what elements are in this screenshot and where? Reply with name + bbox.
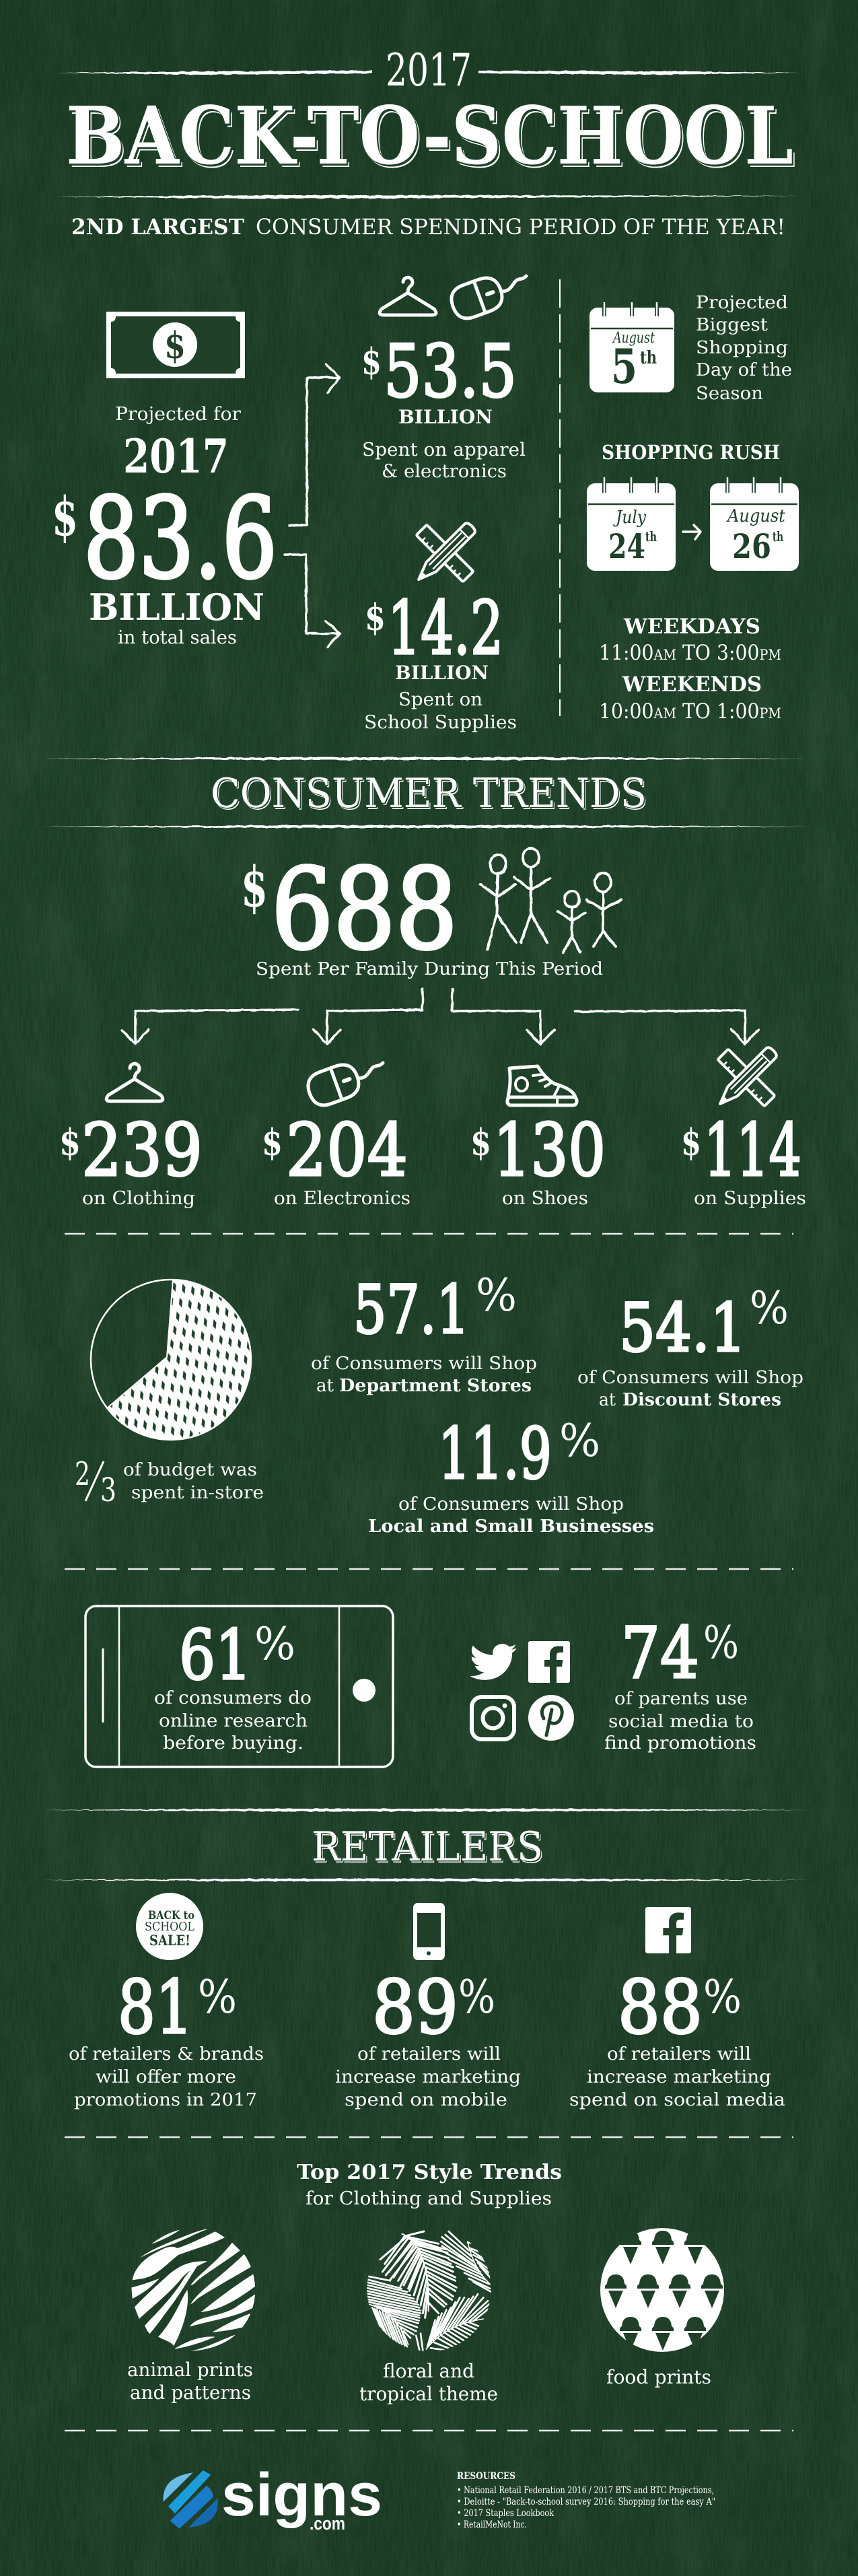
icon: sale badge: SCHOOL [145, 1920, 194, 1934]
description: spend on social media [569, 2090, 785, 2110]
amount: 204 [286, 1109, 408, 1193]
icon: pencil and ruler [414, 522, 476, 584]
percent sign: % [703, 1617, 739, 1669]
stat: department stores: 57.1 [353, 1272, 470, 1349]
icon: sale badge: BACK to [148, 1909, 194, 1922]
stat: clothing [59, 1064, 203, 1209]
pattern: zebra [131, 2229, 255, 2351]
icon: computer mouse [304, 1061, 383, 1109]
description [69, 2044, 264, 2110]
heading: top style trends: Top 2017 Style Trends [297, 2161, 562, 2184]
text: two thirds of budget: spent in-store [131, 1483, 264, 1503]
icon: mobile phone [413, 1903, 445, 1960]
caption: animal prints [127, 2359, 253, 2404]
description: Spent on apparel [362, 440, 526, 460]
description: promotions in 2017 [74, 2090, 257, 2110]
rule under title [55, 195, 801, 199]
panel: social media [470, 1612, 756, 1753]
description [362, 440, 526, 482]
icon: calendar august 26th: August [726, 506, 786, 526]
label: on Clothing [82, 1188, 195, 1209]
icon: dollar bill: $ [164, 324, 186, 367]
percentage: 89 [372, 1964, 458, 2050]
title block [55, 44, 801, 240]
resources list: • RetailMeNot Inc. [457, 2519, 527, 2530]
dollar sign: $ [52, 485, 78, 548]
label: on Supplies [694, 1188, 806, 1209]
description [335, 2044, 521, 2110]
description [364, 689, 517, 733]
stat: discount stores: % [750, 1282, 789, 1334]
panel: school supplies [364, 522, 517, 733]
description: will offer more [96, 2067, 236, 2087]
panel: biggest shopping day [589, 293, 792, 404]
icon: calendar august 26th [710, 477, 799, 571]
section: consumer trends [41, 757, 810, 1209]
text: weekend hours: 10:00AM TO 1:00PM [599, 699, 781, 724]
caption: floral [359, 2360, 498, 2405]
stat: local and small businesses: of Consumers will Shop [398, 1494, 624, 1515]
description: increase marketing [335, 2067, 521, 2087]
description: of consumers do [154, 1688, 312, 1708]
icon: calendar july 24th: July [613, 508, 646, 528]
description [569, 2044, 785, 2110]
dollar sign: $ [365, 596, 386, 639]
total amount: 83.6 [83, 474, 277, 603]
resources list: • Deloitte - "Back-to-school survey 2016: Shopping for the easy A" [457, 2497, 715, 2507]
billion: BILLION [398, 406, 493, 428]
stat: discount stores: at [599, 1390, 616, 1410]
description [604, 1689, 756, 1753]
section: retailers [41, 1809, 810, 2110]
description: of retailers & brands [69, 2044, 264, 2064]
panel: where consumers shop [75, 1269, 803, 1537]
icon: dollar bill [106, 312, 245, 378]
stat: discount stores: of Consumers will Shop [577, 1368, 803, 1388]
label: on Shoes [502, 1188, 588, 1209]
caption: floral: tropical theme [359, 2383, 498, 2405]
amount: 239 [81, 1109, 203, 1193]
year 2017: 2017 [123, 429, 229, 484]
stat: mobile [335, 1903, 521, 2110]
description: of parents use [614, 1689, 748, 1709]
stat: promotions [69, 1893, 264, 2110]
heading: consumer trends: CONSUMER TRENDS [211, 770, 647, 817]
stat: discount stores: Discount Stores [622, 1390, 781, 1410]
stat: social [569, 1907, 785, 2110]
heading rule right [478, 71, 799, 75]
dollar sign: $ [681, 1121, 701, 1164]
icon: facebook [528, 1641, 570, 1683]
divider: dashed [65, 2430, 793, 2431]
description: School Supplies [364, 712, 517, 733]
dollar sign: $ [241, 855, 268, 919]
stat: supplies [681, 1046, 806, 1209]
caption: floral: floral and [383, 2360, 474, 2382]
text: projected biggest shopping day: Day of the [696, 360, 792, 380]
icon: sale badge [136, 1893, 203, 1960]
description: Spent on [398, 689, 482, 710]
icon: sneaker [507, 1066, 577, 1105]
icon: pencil and ruler [715, 1046, 778, 1109]
caption: animal prints: and patterns [130, 2381, 251, 2404]
resources list: • 2017 Staples Lookbook [457, 2508, 555, 2519]
arrow: date range [683, 525, 701, 539]
rule under heading [41, 1879, 810, 1881]
stat: local and small businesses: 11.9 [438, 1413, 552, 1495]
arrow: to apparel and electronics [289, 364, 340, 525]
text: projected biggest shopping day: Season [696, 384, 763, 404]
stat: local and small businesses: % [559, 1415, 600, 1467]
logo mark [164, 2470, 218, 2529]
description: of retailers will [357, 2044, 501, 2064]
text: weekends: WEEKENDS [622, 672, 762, 697]
text: two thirds of budget [75, 1455, 264, 1509]
stat: discount stores: 54.1 [619, 1290, 746, 1367]
section: style trends [127, 2161, 724, 2405]
caption: animal prints: animal prints [127, 2359, 253, 2381]
icon: calendar july 24th: th [645, 528, 657, 545]
arrow: to electronics [314, 989, 423, 1044]
stat: shoes [470, 1066, 606, 1209]
divider: dashed [65, 1568, 793, 1570]
icon: hanger [380, 277, 436, 315]
divider: vertical [559, 279, 561, 716]
stat: local and small businesses: Local and Small Businesses [368, 1517, 654, 1537]
text: projected biggest shopping day: Projected [696, 293, 788, 313]
percentage: 88 [618, 1964, 703, 2050]
family spend amount: 688 [271, 845, 458, 974]
arrow: to shoes [452, 989, 555, 1044]
dollar sign: $ [262, 1121, 283, 1164]
subtitle regular: CONSUMER SPENDING PERIOD OF THE YEAR! [256, 214, 785, 240]
arrow: to clothing [122, 1010, 298, 1044]
divider: dashed [65, 1233, 793, 1234]
percent sign: % [254, 1618, 295, 1670]
logo wordmark: signs [221, 2462, 382, 2529]
icon: calendar july 24th: 24 [608, 526, 645, 566]
pattern: palm fronds [367, 2231, 491, 2351]
caption: food prints: food prints [606, 2366, 711, 2388]
text: two thirds of budget: of budget was [123, 1460, 257, 1480]
label: on Electronics [274, 1188, 410, 1209]
icon: twitter [470, 1644, 517, 1680]
logo domain: .com [310, 2513, 345, 2534]
percent sign: % [198, 1971, 237, 2024]
description: increase marketing [587, 2067, 771, 2087]
amount: 53.5 [384, 330, 517, 414]
icon: smartphone outline [85, 1606, 393, 1767]
description: find promotions [604, 1733, 756, 1753]
rule under heading [41, 825, 810, 828]
amount: 130 [493, 1109, 606, 1193]
chart: two-thirds pie [91, 1280, 251, 1440]
pattern: ice cream cones [600, 2228, 724, 2352]
text: two thirds of budget: 3 [100, 1471, 116, 1509]
resources [457, 2471, 715, 2530]
icon: calendar july 24th [587, 477, 676, 571]
subheading: for Clothing and Supplies [306, 2188, 552, 2209]
text: projected biggest shopping day: Biggest [696, 315, 768, 335]
billion: BILLION [395, 662, 489, 684]
icon: stick figure family [480, 848, 621, 952]
description: before buying. [163, 1733, 303, 1753]
text: two thirds of budget: 2 [75, 1455, 90, 1493]
text: in total sales: in total sales [118, 627, 237, 648]
icon: facebook [645, 1907, 691, 1953]
stat: electronics [262, 1061, 410, 1209]
text: weekdays: WEEKDAYS [623, 615, 760, 639]
icon: pinterest [528, 1695, 574, 1741]
arrow: to supplies [575, 1010, 758, 1044]
amount: 14.2 [388, 585, 503, 671]
icon: calendar august 26th: 26 [732, 526, 771, 566]
description: social media to [608, 1712, 754, 1732]
arrow: to school supplies [285, 555, 340, 647]
percent sign: % [703, 1971, 742, 2024]
percent sign: % [458, 1971, 495, 2024]
amount: 114 [704, 1109, 801, 1193]
subtitle bold: 2ND LARGEST [71, 214, 244, 240]
rule above heading [41, 1809, 810, 1811]
resources list: • National Retail Federation 2016 / 2017 BTS and BTC Projections, [457, 2485, 714, 2496]
billion: BILLION [89, 586, 264, 629]
stat: local and small businesses [368, 1413, 654, 1537]
icon: calendar august 5th: 5 [611, 339, 637, 394]
logo: signs.com [164, 2462, 382, 2534]
resources heading: RESOURCES [457, 2471, 515, 2482]
text: projected for: Projected for [115, 404, 241, 425]
panel: shopping rush [587, 441, 799, 724]
stat: discount stores [577, 1282, 803, 1410]
text: spent per family: Spent Per Family During This Period [256, 959, 603, 979]
panel: online research [85, 1606, 393, 1767]
dollar sign: $ [59, 1121, 81, 1164]
stat: department stores: % [476, 1269, 517, 1321]
rule above heading [41, 757, 810, 760]
panel: apparel and electronics [361, 274, 526, 482]
heading: shopping rush: SHOPPING RUSH [602, 441, 780, 464]
icon: sale badge: SALE! [149, 1932, 190, 1949]
description: online research [159, 1711, 308, 1731]
stat: department stores [311, 1269, 537, 1396]
icon: instagram [472, 1697, 514, 1739]
year: 2017 [386, 44, 472, 96]
icon: calendar august 5th: August [612, 330, 655, 347]
description: spend on mobile [345, 2090, 507, 2110]
icon: calendar august 5th [589, 302, 674, 394]
text: projected biggest shopping day [696, 293, 792, 404]
text: weekday hours: 11:00AM TO 3:00PM [599, 641, 781, 665]
heading rule left [55, 71, 372, 75]
stat: department stores: Department Stores [339, 1376, 532, 1396]
icon: calendar august 5th: th [640, 348, 657, 368]
stat: department stores: of Consumers will Shop [311, 1354, 537, 1374]
icon: computer mouse [448, 274, 526, 322]
panel: total sales [52, 312, 277, 648]
description [154, 1688, 312, 1753]
dollar sign: $ [470, 1121, 491, 1164]
icon: calendar august 26th: th [773, 528, 783, 545]
text: projected biggest shopping day: Shopping [696, 338, 788, 358]
stat: 61 percent: 61 [179, 1615, 252, 1696]
description: & electronics [382, 461, 507, 482]
resources list [457, 2485, 715, 2530]
stat: department stores: at [316, 1376, 334, 1396]
divider: dashed [65, 2136, 793, 2138]
percentage: 81 [118, 1964, 193, 2050]
heading: retailers: RETAILERS [312, 1823, 543, 1871]
dollar sign: $ [361, 340, 382, 383]
footer [164, 2462, 715, 2534]
icon: hanger [106, 1064, 163, 1101]
description: of retailers will [607, 2044, 751, 2064]
stat: 74 percent: 74 [621, 1612, 699, 1694]
